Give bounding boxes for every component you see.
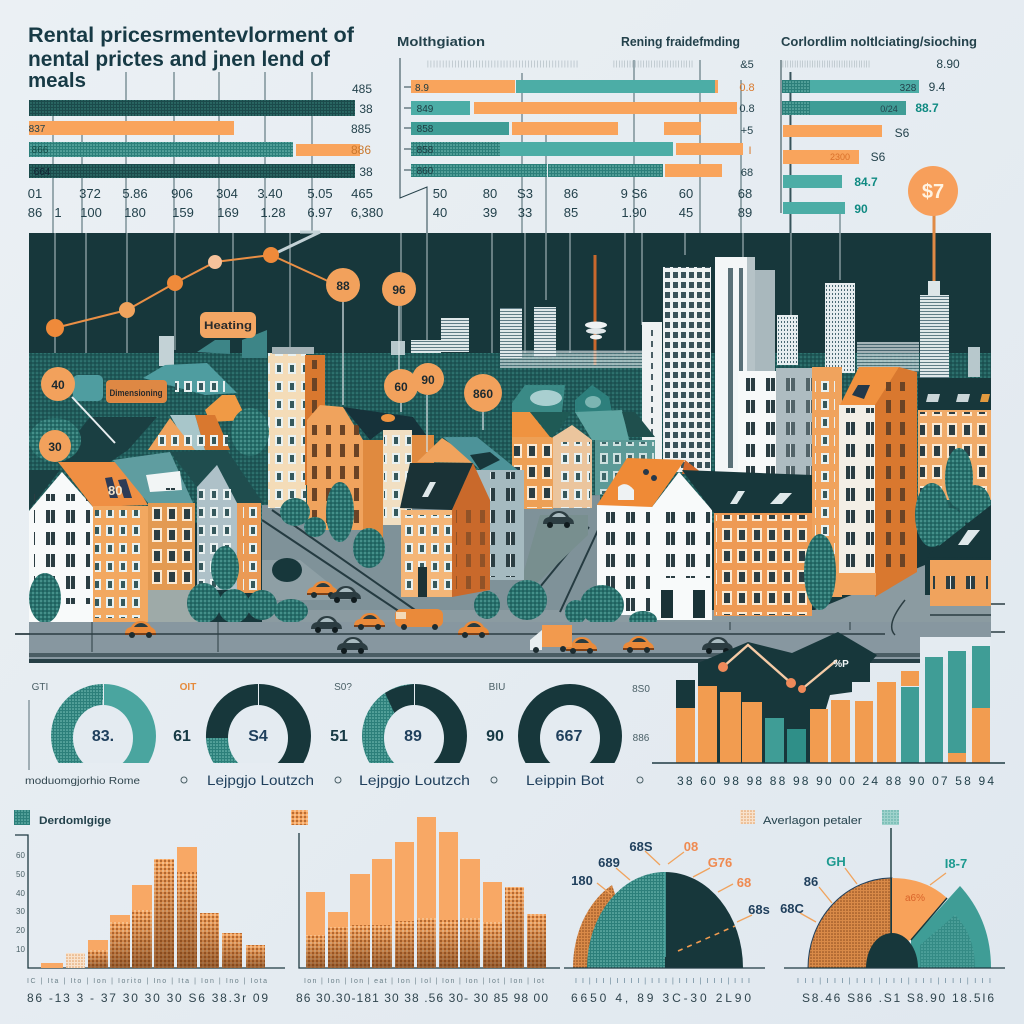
legend (14, 810, 111, 827)
house line (718, 645, 849, 693)
bar value labels (415, 83, 434, 177)
centre-left orange house (307, 405, 434, 550)
bar: row 3 (29, 142, 360, 157)
house line: %P (833, 659, 849, 670)
axis labels: 39 (483, 205, 497, 220)
x labels: S8.46 S86 .S1 S8.90 18.5I6 (802, 991, 994, 1005)
axis labels left chart: 6,380 (351, 205, 383, 220)
bars (782, 80, 919, 214)
right values: I (748, 145, 752, 157)
axis labels: 40 (433, 205, 447, 220)
y ticks: 10 (16, 945, 25, 954)
tick strip: |||||||||||||||||||||||||||||||||||||||||||||||||| (427, 61, 578, 68)
panel: city scene (15, 215, 1005, 664)
values: 8.90 (936, 57, 960, 71)
title: Rental pricesrmentevlorment of (28, 24, 355, 47)
gauge 1 (51, 684, 156, 763)
heading: centre right: Rening fraidefmding (621, 34, 740, 49)
tick strip: |||||||||||||||||||||||||||||| (613, 61, 693, 68)
panel: horizontal bars right (781, 34, 977, 234)
legend (740, 810, 899, 827)
axis labels left chart: 6.97 (307, 205, 333, 220)
gauge side labels (32, 682, 650, 744)
leaders (800, 868, 946, 922)
upper houses behind mid row (512, 385, 612, 412)
right half (665, 872, 743, 968)
x labels: IC | Ita | Ito | Ion | Iorito | Ino | Ita | Ion | Ino | Iota (27, 978, 267, 985)
panel: bar chart with house silhouette (652, 632, 1005, 788)
leaders (597, 851, 752, 922)
labels: 180 (571, 873, 593, 888)
legend: Averlagon petaler (763, 815, 862, 827)
bubbles: 96 (392, 283, 406, 297)
left white house (29, 470, 93, 622)
title: meals (28, 70, 86, 92)
axis labels left chart (28, 186, 383, 220)
y ticks: 20 (16, 926, 25, 935)
axis labels: 86 (564, 186, 578, 201)
bar: row 2 (29, 121, 234, 135)
axis (781, 60, 790, 234)
bar value labels: 860 (417, 166, 434, 177)
dark roof orange block right (682, 470, 812, 616)
guide lines in sky (55, 233, 840, 445)
labels: 68 (737, 875, 751, 890)
axes (15, 835, 285, 968)
gauge centre values: 667 (556, 728, 582, 745)
dark mid roofs left (58, 417, 157, 462)
x labels: I I | I I | I I I I | I I I | I I I | I I I | I I I (575, 978, 750, 985)
orange-roof white house right (597, 458, 712, 620)
trees (29, 408, 991, 629)
panel: horizontal bars centre (397, 34, 755, 234)
right skyline (777, 281, 980, 380)
labels: 08 (684, 839, 698, 854)
x labels: 38 60 98 98 88 98 90 00 24 88 90 07 58 94 (677, 774, 994, 788)
teal house label block (73, 375, 103, 401)
teal roof orange house (113, 452, 195, 590)
labels: a6% (905, 893, 925, 904)
panel: half pie right (780, 828, 1005, 1005)
centre line (664, 872, 666, 957)
sky (29, 233, 991, 663)
values: 88.7 (915, 101, 939, 115)
bar value labels: 858 (417, 124, 434, 135)
panel: donut gauges (25, 682, 650, 788)
orange roof house left (58, 462, 148, 622)
y ticks: 50 (16, 870, 25, 879)
gauge side labels: OIT (180, 682, 196, 693)
gauge names: Lejpgjo Loutzch (207, 772, 314, 788)
callout: Dimensioning: Dimensioning (110, 388, 162, 398)
baseline (784, 967, 1005, 969)
heading: centre left: Molthgiation (397, 34, 485, 49)
teal roof and grey building right of centre house (417, 437, 524, 580)
gauge side labels: GTI (32, 682, 48, 693)
gauge 4 (518, 684, 622, 763)
small left skyline (159, 307, 556, 366)
title (28, 24, 355, 92)
stipple overlays (88, 859, 265, 968)
values: 0/24 (880, 104, 898, 114)
bubbles: 60 (394, 380, 408, 394)
centre house (400, 463, 490, 597)
labels (780, 854, 967, 916)
mid row houses (512, 410, 655, 509)
gauge names (25, 772, 604, 788)
lower left gate building (148, 590, 200, 622)
axis labels left chart: 1 (54, 205, 62, 220)
x labels (27, 978, 268, 1005)
orange stem for big bubble (932, 215, 936, 285)
x labels (797, 978, 994, 1005)
values: 90 (854, 202, 868, 216)
right corner house (925, 505, 991, 606)
y ticks: 40 (16, 889, 25, 898)
gauge 2 (206, 684, 311, 763)
orange roof house left: 80 (108, 483, 122, 498)
teal sector (911, 886, 991, 968)
labels: 689 (598, 855, 620, 870)
y ticks: 60 (16, 851, 25, 860)
bar value labels: 8.9 (415, 83, 429, 94)
axis labels left chart: 01 (28, 186, 42, 201)
leftmost bubble diagonal (72, 397, 115, 443)
van (395, 609, 443, 630)
panel: horizontal bars left (28, 82, 383, 220)
axis labels (433, 186, 752, 220)
skyscraper white (715, 257, 775, 477)
values: 9.4 (929, 80, 946, 94)
callout: Heating: Heating (204, 320, 252, 332)
stipple overlays (306, 887, 546, 968)
axis labels: 80 (483, 186, 497, 201)
values (830, 57, 960, 216)
bar row 3 (411, 122, 701, 135)
side arrows (15, 604, 1005, 634)
right back orange houses (918, 378, 991, 500)
axis labels left chart: 465 (351, 186, 373, 201)
gauge side numbers: 90 (486, 728, 504, 745)
gauge names: Lejpgjo Loutzch (359, 772, 470, 788)
hill band (29, 353, 991, 523)
cars (125, 511, 733, 654)
legend: Derdomlgige (39, 815, 111, 827)
gauge side numbers: 51 (330, 728, 348, 745)
bar value labels: 885 (351, 122, 371, 136)
left half stippled (808, 878, 892, 968)
gauge side numbers: 61 (173, 728, 191, 745)
x labels: 6650 4, 89 3C-30 2L90 (571, 991, 751, 1005)
axis labels: 50 (433, 186, 447, 201)
axis labels left chart: 159 (172, 205, 194, 220)
gauge markers (181, 777, 643, 783)
right values (739, 59, 755, 179)
bar row 2 (411, 101, 737, 115)
axis labels: 9 S6 (621, 186, 647, 201)
axis labels left chart: 304 (216, 186, 238, 201)
bubble stems (343, 302, 483, 452)
y ticks: 30 (16, 907, 25, 916)
bar row 5 (411, 164, 722, 177)
callout: Dimensioning (106, 380, 167, 403)
tall orange block (812, 367, 917, 597)
bar value labels: 837 (29, 124, 46, 135)
bubbles: 860 (473, 387, 493, 401)
bars (676, 646, 990, 763)
y ticks (16, 851, 25, 954)
bar row 1 (411, 80, 718, 93)
dashed line (678, 926, 735, 951)
bubbles: 30 (48, 440, 62, 454)
right values: &5 (740, 59, 754, 71)
bar: row 1 (29, 100, 355, 116)
labels: I8-7 (945, 856, 967, 871)
bar value labels: 38 (359, 102, 373, 116)
house silhouette (698, 632, 877, 763)
title: nental prictes and jnen lend of (28, 48, 331, 71)
values: S6 (895, 126, 910, 140)
gauge centre values: S4 (248, 728, 268, 745)
axis labels left chart: 100 (80, 205, 102, 220)
x labels: 86 -13 3 - 37 30 30 30 S6 38.3r 09 (27, 991, 268, 1005)
x labels: Ion | Ion | Ion | eat | Ion | Iol | Ion | Ion | Iot | Ion | Iot (304, 978, 544, 985)
labels: 68C (780, 901, 805, 916)
axis labels: 68 (738, 186, 752, 201)
axis labels left chart: 3.40 (257, 186, 283, 201)
upper left houses (143, 363, 247, 450)
street (15, 622, 991, 663)
axis labels: S3 (517, 186, 533, 201)
stipple shading (306, 887, 546, 968)
gauge centre values: 89 (404, 728, 422, 745)
guide lines from charts into the scene (53, 60, 840, 234)
bubbles: 40 (51, 378, 65, 392)
big orange bubble: $7 (922, 181, 944, 203)
axis labels: 89 (738, 205, 752, 220)
right values: 0.8 (739, 82, 755, 94)
values: 328 (900, 83, 917, 94)
axis labels: 85 (564, 205, 578, 220)
gauge centre values (92, 728, 582, 745)
bar value labels: 485 (352, 82, 372, 96)
bars (306, 817, 502, 968)
axis labels left chart: 180 (124, 205, 146, 220)
gauge side labels: 886 (633, 733, 650, 744)
baseline (564, 967, 765, 969)
tick strip: |||||||||||||||||||||||||||||||||||| (782, 61, 870, 68)
right values: 0.8 (739, 103, 755, 115)
gauge 3 (362, 684, 467, 763)
right road lip (892, 600, 991, 635)
bubbles (39, 268, 502, 462)
bubbles: 88 (336, 279, 350, 293)
gauge side marks (28, 700, 30, 770)
bar row 4 (411, 142, 743, 156)
panel: half pie centre (564, 810, 899, 1005)
x labels (571, 978, 751, 1005)
bar value labels: 866 (32, 145, 49, 156)
heading: Corlordlim noltlciating/sioching (781, 34, 977, 49)
bar value labels: 664 (34, 167, 51, 178)
labels: 86 (804, 874, 818, 889)
tower left (642, 322, 662, 472)
x labels: 86 30.30-181 30 38 .56 30- 30 85 98 00 (296, 991, 548, 1005)
right values: +5 (741, 125, 753, 137)
bar value labels: 849 (417, 104, 434, 115)
axis (652, 762, 1005, 764)
bars (41, 847, 265, 968)
back wedge (573, 885, 640, 968)
bar value labels: 858 (417, 145, 434, 156)
axis labels left chart: 372 (79, 186, 101, 201)
right values: 68 (741, 167, 753, 179)
ground road (262, 495, 600, 625)
values: S6 (871, 150, 886, 164)
TV tower (585, 255, 607, 365)
axis labels: 45 (679, 205, 693, 220)
gauge side numbers (173, 728, 504, 745)
white grey block (738, 368, 813, 481)
gauge side labels: 8S0 (632, 684, 650, 695)
callout: Heating (200, 312, 256, 338)
bar value labels: 38 (359, 165, 373, 179)
axis labels left chart: 169 (217, 205, 239, 220)
divider (891, 828, 947, 940)
labels: G76 (708, 855, 732, 870)
bar value labels: 886 (351, 143, 371, 157)
orange wedge (892, 878, 947, 945)
values: 2300 (830, 152, 850, 162)
axis labels: 60 (679, 186, 693, 201)
labels: 68s (748, 902, 770, 917)
gauge side labels: S0? (334, 682, 352, 693)
labels: GH (826, 854, 846, 869)
left half (587, 872, 665, 968)
grey-blue gabled building (170, 450, 263, 593)
axis labels left chart: 906 (171, 186, 193, 201)
axes (299, 833, 560, 968)
labels (571, 839, 770, 917)
skyscraper grid (663, 267, 711, 472)
bar: row 4 (29, 164, 355, 178)
big orange bubble (908, 166, 958, 216)
bubbles: 90 (421, 373, 435, 387)
gauge names: moduomgjorhio Rome (25, 776, 140, 787)
values: 84.7 (854, 175, 878, 189)
axis labels left chart: 5.86 (122, 186, 148, 201)
teal inner dots (920, 915, 975, 968)
tower orange (268, 347, 325, 508)
line chart in sky (46, 232, 330, 337)
axis labels: 33 (518, 205, 532, 220)
tick strip (427, 61, 693, 68)
axis labels left chart: 86 (28, 205, 42, 220)
gauge centre values: 83. (92, 728, 114, 745)
axis labels left chart: 5.05 (307, 186, 333, 201)
gauge names: Leippin Bot (526, 772, 604, 788)
long low skyline (500, 350, 650, 368)
gauge side labels: BIU (489, 682, 505, 693)
axis labels left chart: 1.28 (260, 205, 286, 220)
stipple shading (88, 859, 265, 968)
panel: histogram centre (291, 810, 560, 1005)
legend swatch (291, 810, 308, 825)
panel: histogram left (14, 810, 285, 1005)
delivery truck (530, 625, 572, 653)
kinked axis (400, 58, 427, 234)
x labels (296, 978, 548, 1005)
labels: 68S (629, 839, 653, 854)
teal shapes on hill (197, 330, 267, 358)
cut-out corner (920, 637, 991, 664)
bar value labels (29, 82, 373, 179)
x labels: I I I | I I I | I I I | I I I | I I I | I I I | I I I (797, 978, 991, 985)
centre cap (866, 933, 918, 968)
axis labels: 1.90 (621, 205, 647, 220)
